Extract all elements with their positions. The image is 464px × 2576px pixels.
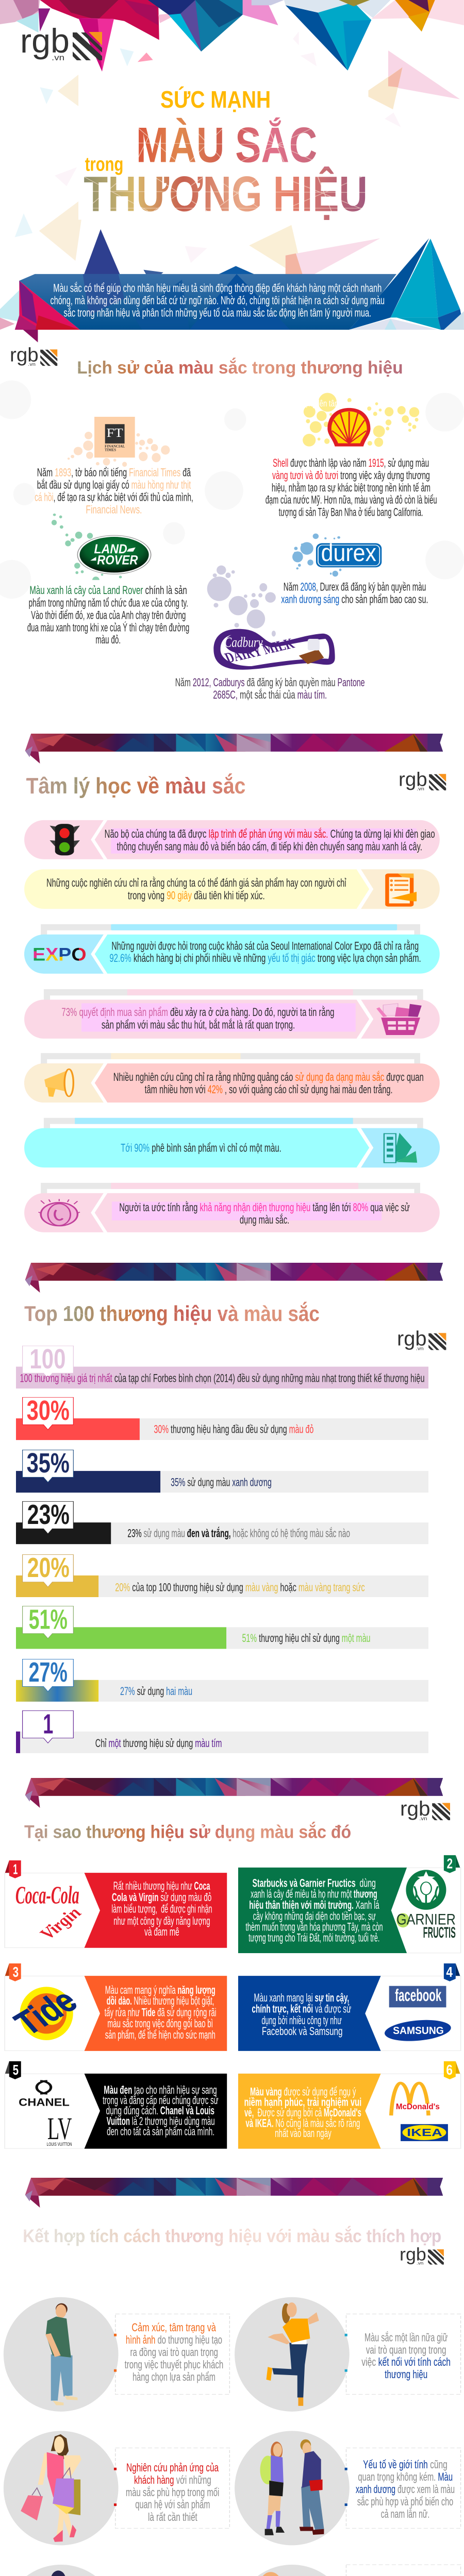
card 3: orange: dồi dào. Nhiều thương hiệu bột giặt, [107, 1994, 214, 2007]
row 1 right: woman in orange [235, 2297, 461, 2412]
bottom peaks and intro band [0, 229, 464, 330]
card 3: orange: 3 [13, 1964, 19, 1980]
card 1: red: Rất nhiều thương hiệu như Coca [113, 1879, 210, 1892]
row 3 left: woman on phone [4, 2565, 229, 2576]
row: 51 percent green [16, 1603, 428, 1649]
row 1 left: man in green: hàng chọn lựa sản phẩm [132, 2370, 216, 2383]
ribbon banner 4 [25, 2178, 443, 2208]
section: why brands use colours: như một công ty đầy năng lượng [113, 1914, 210, 1927]
rgb logo: hero [20, 22, 102, 62]
text: shell [266, 456, 437, 519]
rgb logo: why section: .vn [419, 1816, 427, 1822]
icon: eye [39, 1199, 80, 1226]
rgb logo: match section: .vn [417, 2261, 424, 2266]
section: history of colour in brands: Vào thời điểm đó, xe đua của Anh chạy trên đường [31, 608, 186, 622]
rgb logo: top 100: rgb [397, 1327, 427, 1350]
section: why brands use colours: làm biểu tượng, để được ghi nhận [111, 1902, 212, 1916]
card 3: orange: Màu cam mang ý nghĩa năng lượng [105, 1983, 216, 1996]
card 1: red [5, 1860, 227, 1948]
logo: financial times [94, 417, 135, 457]
card 5: black: Màu đen tạo cho nhãn hiệu sự sang [104, 2083, 217, 2096]
row: 100 brands: 100 [29, 1343, 65, 1374]
rgb logo: psychology [399, 768, 446, 791]
text: land rover [27, 584, 189, 646]
section: history of colour in brands: phẩm trong những năm tổ chức đua xe của công ty. [29, 596, 188, 609]
row 2 left: woman with bags: khách hàng với những [134, 2473, 211, 2486]
logo: financial times: FINANCIAL [105, 444, 125, 448]
text: durex [281, 580, 428, 606]
card 1: red: 1 [13, 1861, 18, 1877]
row 1 left: man in green: hình ảnh do thương hiệu tạo [126, 2333, 222, 2346]
text: cadbury [175, 675, 365, 701]
row 2 left: woman with bags [4, 2431, 229, 2545]
card 1: red: Coca-Cola [15, 1881, 79, 1909]
card 5: black: 5 [13, 2062, 19, 2078]
intro paragraph [51, 281, 385, 319]
card 4: blue: dụng bởi nhiều công ty như [261, 2013, 342, 2027]
row: 35 percent blue [16, 1447, 428, 1493]
pill: brand recognition: dụng màu sắc. [240, 1213, 289, 1226]
ribbon banner 1 [25, 734, 443, 764]
card 1: red: Cola và Virgin sử dụng màu đỏ [112, 1890, 211, 1904]
icon: expo: EXPO [32, 944, 87, 965]
logos: mcdonalds and ikea [391, 2083, 448, 2141]
cards continued: màu sắc trong việc đóng gói bao bì [107, 2017, 213, 2030]
card 1: red: và đam mê [144, 1925, 179, 1938]
card 2: green [238, 1855, 461, 1953]
pill: 90 percent single colour [24, 1118, 440, 1167]
logo: tide [4, 1983, 87, 2041]
logo: land rover: LAND [94, 541, 127, 556]
icon: basket [376, 1004, 422, 1035]
logo: tide: Tide [4, 1983, 87, 2041]
row: 20 percent yellow [16, 1552, 428, 1597]
icon: traffic light [49, 824, 80, 855]
row: 35 percent blue: 35% [27, 1447, 70, 1478]
text: financial times: bắt đầu sử dụng loại giấy có màu hồng như thịt [37, 478, 191, 491]
logo: cadbury dairy milk: Cadbury [224, 635, 263, 650]
logos: facebook and samsung [383, 1986, 453, 2044]
illustration: man and woman in hoodies [263, 2572, 278, 2576]
card 5: black [5, 2061, 227, 2149]
logo: financial times: TIMES [105, 448, 116, 452]
illustration: shopper [21, 2434, 81, 2542]
card 4: blue: 4 [446, 1964, 453, 1980]
ribbon banner 3 [25, 1778, 443, 1808]
logo: cadbury dairy milk [213, 629, 335, 670]
card 4: blue [238, 1963, 461, 2051]
logos: chanel and louis vuitton: LOUIS VUITTON [47, 2142, 72, 2147]
logos: mcdonalds and ikea: IKEA [407, 2127, 442, 2139]
row: 27 percent two colours: 27% sử dụng hai màu [120, 1684, 192, 1698]
heading: Tâm lý học về màu sắc [26, 773, 245, 799]
section: colour psychology [24, 675, 440, 974]
card 6: yellow: 6 [446, 2062, 453, 2078]
section: top 100 brands and colour [16, 1301, 428, 1649]
card 6: yellow: Màu vàng được sử dụng để ngụ ý [250, 2085, 356, 2098]
pill: ads with colour [24, 1053, 440, 1103]
logo: land rover [77, 535, 151, 574]
row: 35 percent blue: 35% sử dụng màu xanh dương [171, 1476, 272, 1488]
row 2 right: couple [235, 2431, 461, 2545]
ghost white text over bubbles: ộng lên tâm lý người [305, 398, 367, 409]
card 4: blue: chính trực, kết nối và được sử [252, 2002, 351, 2015]
text: financial times: Năm 1893, tờ báo nổi tiếng Financial Times đã [37, 466, 191, 479]
row 1 left: man in green: ra đồng vai trò quan trọng [130, 2346, 218, 2359]
cards continued: sản phẩm, để thể hiện cho sức mạnh [105, 2028, 216, 2041]
rgb logo: top 100: .vn [416, 1346, 424, 1351]
icon: megaphone [44, 1069, 73, 1097]
logos: coca-cola and virgin [15, 1881, 86, 1942]
pill: brand recognition [24, 1183, 440, 1232]
pill: 90 seconds: trong vòng 90 giây đầu tiên khi tiếp xúc. [128, 889, 265, 902]
logos: chanel and louis vuitton [19, 2081, 72, 2147]
text: cadbury: 2685C, một sắc thái của màu tím. [213, 688, 327, 701]
ribbon banner 2 [25, 1263, 443, 1293]
bubbles: durex [292, 534, 341, 577]
card 6: yellow: vẻ, Được sử dụng bởi cả McDonald's [244, 2106, 361, 2119]
rgb logo: match section: rgb [400, 2244, 426, 2264]
text: land rover: Màu xanh lá cây của Land Rover chính là sản [29, 584, 187, 597]
section: history of colour in brands: cá hồi, để tạo ra sự khác biệt với đối thủ của mình, [35, 490, 193, 504]
pill: 73 percent in store [24, 989, 440, 1039]
bubbles: financial times [68, 432, 170, 467]
logos: starbucks and garnier [396, 1870, 456, 1941]
text: cadbury: Năm 2012, Cadburys đã đăng ký bản quyền màu Pantone [175, 675, 365, 689]
rgb logo: history: .vn [28, 362, 36, 367]
row 1 left: man in green: Cảm xúc, tâm trạng và [131, 2320, 216, 2334]
card 4: blue: Màu xanh mang lại sự tin cậy, [254, 1991, 349, 2004]
logos: coca-cola and virgin: Virgin [35, 1904, 86, 1942]
logo: shell [327, 408, 371, 447]
title: sức mạnh: SỨC MẠNH [160, 86, 271, 113]
text: financial times: Financial News. [86, 503, 142, 516]
pill: 90 seconds [24, 869, 440, 909]
row: 27 percent two colours: 27% [29, 1656, 68, 1688]
row: 30 percent red: 30% [27, 1395, 70, 1426]
row: 27 percent two colours [16, 1656, 428, 1702]
logo: land rover: ROVER [97, 553, 138, 567]
bubbles: shell [303, 393, 419, 447]
rgb logo: why section: rgb [400, 1797, 430, 1820]
row: one purple brand [16, 1708, 428, 1753]
card 6: yellow [238, 2061, 461, 2149]
pill: 90 percent single colour: Tới 90% phê bình sản phẩm vì chỉ có một màu. [121, 1141, 281, 1154]
cards continued: trọng và đẳng cấp nếu chúng được sử [103, 2093, 219, 2107]
logo: cadbury dairy milk: DAIRY MILK [222, 635, 297, 666]
rgb logo: why section [400, 1797, 450, 1822]
row 1 left: man in green [4, 2297, 229, 2412]
top geometric shards [0, 0, 464, 72]
section: history of colour in brands [0, 330, 464, 670]
row 2 left: woman with bags: Nghiên cứu phản ứng của [126, 2461, 219, 2474]
row 2 left: woman with bags: màu sắc phù hợp trong mối [126, 2485, 219, 2499]
illustration: man [45, 2303, 77, 2405]
rgb logo: hero: rgb [20, 22, 70, 60]
icon: orange document [385, 874, 417, 907]
psychology pills continued [24, 989, 440, 1232]
text: financial times [35, 466, 193, 516]
row: 51 percent green: 51% [29, 1603, 68, 1635]
row: one purple brand: Chỉ một thương hiệu sử dụng màu tím [95, 1737, 222, 1750]
hero panel [0, 0, 464, 330]
rgb logo: hero: .vn [52, 54, 64, 62]
card 2: green: 2 [447, 1856, 453, 1872]
rgb logo: history [10, 344, 57, 367]
logos: chanel and louis vuitton: CHANEL [19, 2097, 70, 2109]
rgb logo: history: rgb [10, 344, 39, 366]
faint circles [0, 380, 464, 599]
row: 23 percent black and white: 23% [27, 1499, 70, 1530]
title: trong: trong [85, 154, 123, 175]
card 4: blue: Facebook và Samsung [262, 2025, 343, 2038]
section: why brands use colours [5, 1656, 461, 1953]
card 5: black: Vuitton là 2 thương hiệu dùng màu [107, 2114, 215, 2127]
faint background triangles [15, 31, 460, 280]
card 3: orange [4, 1963, 227, 2051]
rgb logo: psychology: .vn [417, 786, 424, 791]
pill: brain programmed [24, 820, 440, 859]
illustration: student couple [260, 2439, 324, 2535]
row: 20 percent yellow: 20% [27, 1552, 70, 1583]
row 1 left: man in green: trong việc thuyết phục khách [125, 2358, 223, 2371]
illustration: woman on phone [44, 2570, 75, 2576]
row 2 left: woman with bags: quan hệ với sản phẩm [135, 2498, 210, 2511]
text: land rover: màu đỏ. [95, 633, 121, 646]
rgb logo: top 100 [397, 1327, 446, 1351]
row: 100 brands [16, 1343, 428, 1388]
cards continued: đen cho tất cả sản phẩm của mình. [107, 2125, 214, 2138]
logos: mcdonalds and ikea: McDonald's [396, 2103, 440, 2111]
pill: seoul color expo [24, 924, 440, 974]
icon: colour swatches [384, 1133, 417, 1163]
card 3: orange: tẩy rửa như Tide đã sử dụng rộng rãi [105, 2006, 217, 2019]
row 2 left: woman with bags: là rất cần thiết [148, 2511, 197, 2523]
rgb logo: match section [400, 2244, 444, 2266]
section: personality grid [4, 2297, 461, 2576]
row: 30 percent red [16, 1395, 428, 1440]
row: 20 percent yellow: 20% của top 100 thương hiệu sử dụng màu vàng hoặc màu vàng trang sức [115, 1581, 365, 1594]
bubbles: cadbury [207, 566, 276, 637]
illustration: dancing woman [267, 2302, 319, 2406]
row 3 right: hooded couple [235, 2565, 461, 2576]
bubbles: land rover [52, 514, 122, 580]
row: 51 percent green: 51% thương hiệu chỉ sử dụng một màu [242, 1631, 371, 1645]
logo: durex: durex [321, 539, 376, 567]
row: 30 percent red: 30% thương hiệu hàng đầu đều sử dụng màu đỏ [154, 1422, 313, 1436]
cards continued [4, 1963, 461, 2246]
row: one purple brand: 1 [43, 1708, 53, 1739]
corner shard [23, 330, 38, 342]
logo: financial times: FT [107, 426, 123, 440]
pill: brand recognition: Người ta ước tính rằng khả năng nhận diện thương hiệu tăng lên tới 80% qua việc sử [119, 1201, 410, 1214]
card 5: black: dụng đúng cách. Chanel và Louis [106, 2104, 214, 2117]
section: history of colour in brands: đua màu xanh trong khi xe của Ý thì chạy trên đường [27, 621, 189, 634]
title: màu sắc: MÀU SẮC [136, 117, 317, 173]
row: 23 percent black and white [16, 1499, 428, 1544]
card 5: black: LV [47, 2111, 72, 2146]
logo: durex [316, 539, 382, 567]
card 6: yellow: nhất vào ban ngày [275, 2127, 332, 2140]
rgb logo: psychology: rgb [399, 768, 427, 790]
